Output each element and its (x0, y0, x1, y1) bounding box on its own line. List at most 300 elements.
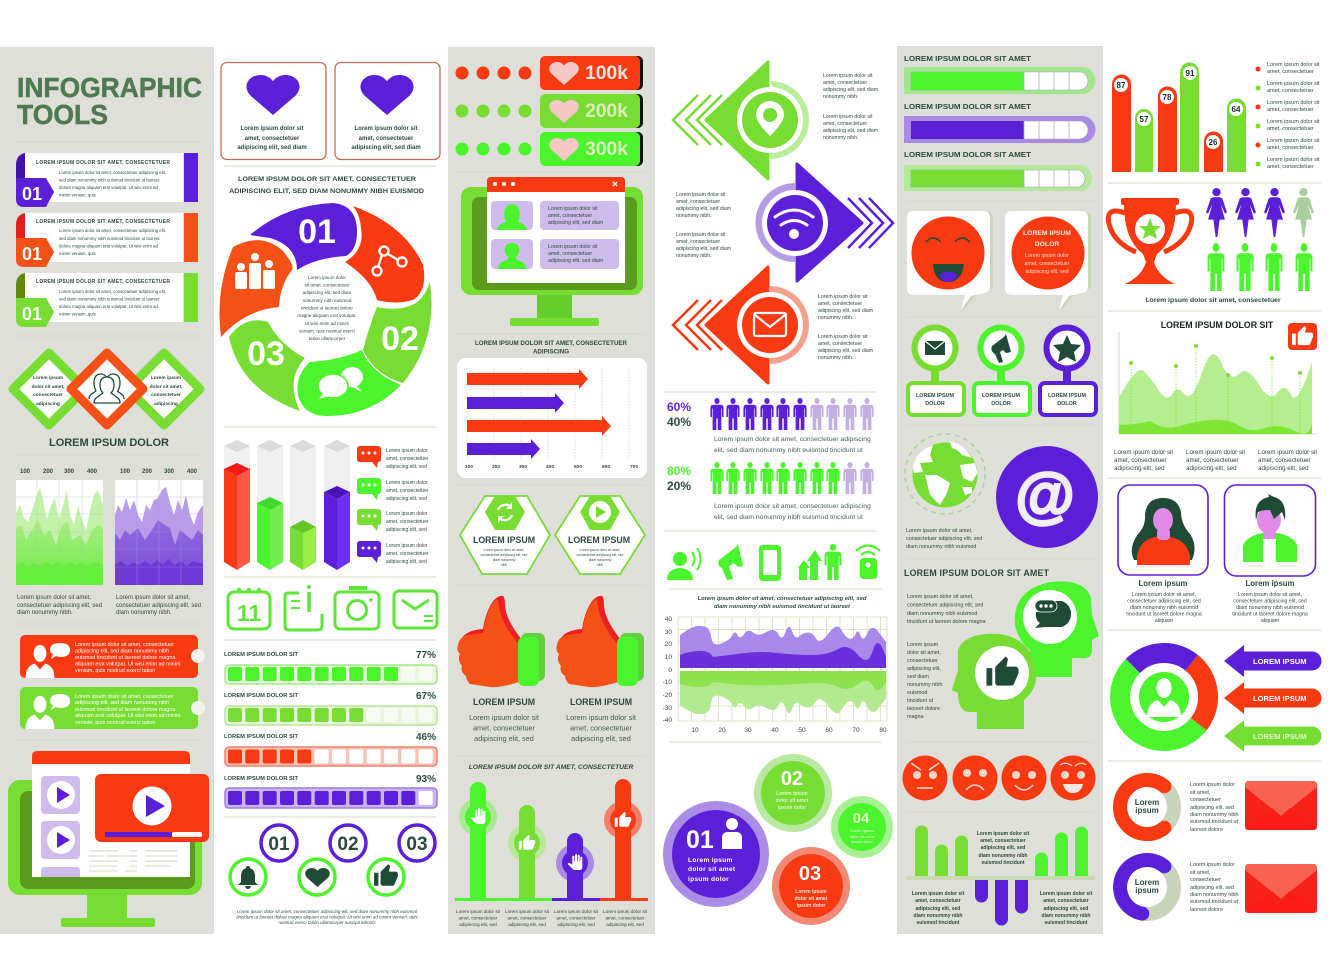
legend: bars: amet, consectetuer (1267, 126, 1314, 132)
chart: rounded number bars: 87 (1117, 81, 1126, 90)
legend item: purple (357, 541, 429, 565)
banner: green 01: Lorem ipsum dolor sit amet, consectetuer adipiscing elit, (59, 289, 166, 294)
bubble 02: ipsum dolor (778, 805, 806, 811)
panel: numbered circles and icons (230, 825, 435, 895)
chart: circular five-segment ring: 01 (298, 213, 336, 251)
callout: red speech banner (20, 635, 205, 678)
profile: woman: adipiscing elit, sed diam (548, 220, 603, 226)
thumb: right: Lorem ipsum dolor sit (566, 713, 636, 722)
arrow: red mail: nonummy nibh. (818, 315, 853, 321)
area chart captions: adipiscing elit, sed (1186, 465, 1237, 472)
thumb: right: adipiscing elit, sed (571, 734, 631, 743)
icon: growth person (798, 544, 841, 580)
capsule: lime (904, 150, 1092, 191)
chart: bipolar area chart: 70 (852, 727, 860, 734)
bar: green hand (459, 782, 497, 898)
pictogram: women (1206, 188, 1314, 237)
panel: portrait man (1224, 485, 1316, 624)
area chart captions: amet, consectetuer (1114, 457, 1167, 464)
panel: red donut and envelope (1120, 780, 1317, 834)
panel: hexagons (460, 496, 645, 574)
thumb: left: Lorem ipsum dolor sit (469, 713, 539, 722)
column background: left (0, 47, 214, 934)
bar captions: adipiscing elit, sed (508, 922, 546, 927)
hexagon: refresh: nibh (501, 563, 507, 567)
progress: 46%: 46% (416, 732, 436, 743)
bubble 01: Lorem ipsum (688, 857, 733, 864)
bubble 03: dolor sit amet (795, 896, 828, 902)
arrow: red mail: Lorem ipsum dolor sit (818, 294, 868, 300)
panel: people stats 80/20 (667, 462, 874, 521)
text: centre: amet, consectetuer (980, 838, 1026, 844)
thumb: left: adipiscing elit, sed (474, 734, 534, 743)
counter: 200k: 200k (585, 100, 628, 122)
bubble: laughing face (907, 211, 993, 311)
video player card (95, 774, 209, 842)
callout: green speech banner: veniam, quis nostrud exerci tation (75, 720, 155, 726)
icon: trophy (1108, 198, 1192, 284)
bar captions: Lorem ipsum dolor sit (505, 909, 550, 914)
diamond: right text: dolor sit amet, (150, 384, 183, 390)
globe caption: diam nonummy nibh euismod (906, 544, 976, 550)
banner: orange 01: sed diam nonummy nibh euismod tincidunt ut laoreet (59, 236, 160, 241)
capsule: purple (904, 102, 1096, 143)
icon: calendar (228, 588, 270, 629)
arrow label: lime: LOREM IPSUM (1253, 732, 1307, 741)
panel: portrait woman: consectetuer adipiscing elit, sed (1127, 598, 1201, 604)
numbered circles: 03 (406, 834, 428, 855)
head: bright green (1015, 581, 1099, 677)
panel: portrait man: tincidunt ut laoreet dolore magna (1232, 612, 1308, 618)
banner: orange 01: 01 (22, 244, 42, 264)
bar captions: Lorem ipsum dolor sit (554, 909, 599, 914)
heading: lorem ipsum dolor: LOREM IPSUM DOLOR (49, 437, 169, 449)
panel: purple donut and envelope: ipsum (1135, 886, 1159, 895)
hexagon: play: diam nonummy (589, 558, 612, 562)
hexagon: play: nibh (597, 563, 603, 567)
callout: green speech banner: euismod tincidunt ut laoreet dolore magna (75, 707, 175, 713)
progress: 77% (224, 650, 437, 684)
legend item: bright green: amet, consectetuer (386, 488, 429, 494)
chart: bipolar area chart: -40 (663, 717, 672, 724)
panel: two heads (907, 581, 1099, 729)
bubble: red text circle: LOREM IPSUM (1023, 230, 1071, 237)
arrow: green location: Lorem ipsum dolor sit (823, 73, 873, 79)
chart: bipolar area chart: 50 (798, 727, 806, 734)
arrow: red mail (673, 267, 873, 383)
bars: bright green up (1035, 827, 1088, 876)
thumb: left (457, 596, 545, 743)
arrow: purple wifi: adipiscing elit, sed diam (676, 206, 731, 212)
diamond: centre with people icon (71, 353, 143, 425)
arrow: green location: adipiscing elit, sed diam (823, 128, 878, 134)
callout: red speech banner: adipiscing elit, sed diam nonummy nibh (75, 648, 169, 654)
arrow: red mail: nonummy nibh. (818, 355, 853, 361)
icon: phone (759, 545, 781, 581)
banner: purple 01: 01 (22, 184, 42, 204)
card: heart 1: adipiscing elit, sed diam (237, 145, 307, 151)
diamond: right text: Lorem ipsum (151, 375, 181, 381)
counter: 100k (456, 56, 643, 90)
bar captions: adipiscing elit, sed (459, 922, 497, 927)
area chart captions: adipiscing elit, sed (1258, 465, 1309, 472)
panel: portrait woman: Lorem ipsum dolor sit amet, (1132, 592, 1196, 598)
numbered circles: 01 (268, 834, 290, 855)
counter: 100k: 100k (585, 62, 628, 84)
thumb: right (556, 596, 644, 743)
panel: portrait man: consectetuer adipiscing elit, sed (1233, 598, 1307, 604)
banner: green 01: 01 (22, 304, 42, 324)
text: lower: dolor sit amet, (907, 650, 941, 656)
bubble 02: 02 (781, 768, 803, 790)
arrow label: purple: LOREM IPSUM (1253, 657, 1307, 666)
bubble 04: dolor sit amet (850, 835, 875, 839)
text: right: euismod tincidunt (1044, 920, 1088, 926)
bubble 04: ipsum dolor (851, 840, 873, 844)
illustration: video monitor (8, 751, 209, 927)
thumb: right: LOREM IPSUM (570, 697, 632, 707)
bubble: red text circle: adipiscing elit, sed (1025, 269, 1069, 275)
banner: orange 01: minim veniam, quis (59, 251, 96, 256)
chart: bipolar area chart (663, 616, 887, 734)
chart: green area chart: 100 (20, 469, 31, 475)
icon: mail (394, 591, 437, 628)
legend: bars: amet, consectetuer (1267, 69, 1314, 75)
globe caption: Lorem ipsum dolor sit amet, (906, 528, 973, 534)
chart: bipolar area chart: 30 (744, 727, 752, 734)
bubble 04: 04 (853, 810, 870, 827)
thumb: left: LOREM IPSUM (473, 697, 535, 707)
banner: purple 01: dolore magna aliquam erat volutpat. Ut wisi enim ad (59, 185, 158, 190)
area chart captions: amet, consectetuer (1258, 457, 1311, 464)
profile: man: adipiscing elit, sed diam (548, 258, 603, 264)
legend item: lime: amet, consectetuer (386, 519, 429, 525)
text: lower: adipiscing elit, (907, 666, 941, 672)
bubble 01: dolor sit amet (688, 866, 736, 873)
chart: green area chart: 200 (43, 469, 54, 475)
callout: green speech banner: adipiscing elit, sed diam nonummy nibh (75, 700, 169, 706)
icons: outline row (228, 585, 437, 630)
panel: purple donut and envelope: adipiscing elit, sed (1190, 885, 1234, 891)
card: heart 2 (335, 62, 440, 160)
banner: orange 01: LOREM IPSUM DOLOR SIT AMET, CONSECTETUER (36, 219, 170, 225)
arrow: purple wifi (676, 164, 893, 281)
arrows: three labels (1224, 645, 1322, 752)
ring centre text: veniam, quis nostrud exerci (299, 328, 355, 334)
pictogram row: 8 of 10 (710, 462, 874, 494)
chart: circular five-segment ring (220, 203, 431, 416)
bars: lime up (915, 826, 968, 876)
heading: heads: LOREM IPSUM DOLOR SIT AMET (904, 568, 1050, 578)
arrow: purple wifi: Lorem ipsum dolor sit (676, 192, 726, 198)
panel: numbered bubbles (663, 754, 893, 925)
chart: bipolar area chart: 10 (691, 727, 699, 734)
heading: ring: LOREM IPSUM DOLOR SIT AMET, CONSECTETUER (238, 176, 416, 183)
chart: bipolar area chart: 60 (825, 727, 833, 734)
arrow: purple wifi: Lorem ipsum dolor sit (676, 232, 726, 238)
banner: green 01: dolore magna aliquam erat volutpat. Ut wisi enim ad (59, 304, 158, 309)
legend: bars (1256, 62, 1320, 170)
pin: mail (908, 328, 964, 415)
callout: green speech banner: aliquam erat volutpat. Ut wisi enim ad minim (75, 713, 181, 719)
icon: chat bubbles (318, 367, 363, 399)
chart: horizontal arrows: 500 (574, 464, 582, 470)
chart: rounded number bars: 78 (1163, 93, 1172, 102)
arrow: green location: amet, consectetuer (823, 80, 867, 86)
icon: envelope (1245, 864, 1317, 913)
arrow: green location: amet, consectetuer (823, 121, 867, 127)
text: lower: nonummy nibh (907, 682, 942, 688)
panel: red donut and envelope: adipiscing elit, sed (1190, 805, 1234, 811)
legend: bars: amet, consectetuer (1267, 164, 1314, 170)
bar captions: amet, consectetuer (458, 916, 498, 920)
legend item: bright green: adipiscing elit, sed (386, 496, 427, 502)
legend: bars: Lorem ipsum dolor sit (1267, 100, 1320, 106)
column background: right (897, 46, 1103, 934)
callout: red speech banner: aliquam erat volutpat. Ut wisi enim ad minim (75, 662, 181, 668)
banner: green 01: LOREM IPSUM DOLOR SIT AMET, CONSECTETUER (36, 279, 170, 285)
icon circles (230, 859, 404, 895)
legend: speech bubbles (357, 446, 429, 565)
banner: purple 01: sed diam nonummy nibh euismod tincidunt ut laoreet (59, 178, 160, 182)
panel: numbered banners (16, 153, 198, 327)
icon: envelope (1245, 781, 1317, 830)
legend: bars: amet, consectetuer (1267, 88, 1314, 94)
text: right: adipiscing elit, sed (1044, 906, 1088, 912)
chart: bipolar area chart: 20 (718, 727, 726, 734)
chart: bipolar area chart: 30 (665, 629, 672, 636)
bubble 03: ipsum dolor (797, 903, 825, 909)
bar captions: amet, consectetuer (556, 916, 596, 920)
chart: rounded number bars: 26 (1209, 138, 1218, 147)
hexagon: refresh: diam nonummy (493, 558, 516, 562)
panel: big thumbs up (457, 596, 644, 743)
numbered circles (261, 825, 435, 861)
bar captions (456, 909, 648, 927)
banner: orange 01: dolore magna aliquam erat volutpat. Ut wisi enim ad (59, 244, 158, 248)
card: heart 2: Lorem ipsum dolor sit (354, 126, 418, 132)
bar captions: amet, consectetuer (605, 916, 645, 920)
banner: purple 01: minim veniam, quis (59, 192, 96, 198)
callout: green speech banner: Lorem ipsum dolor sit amet, consectetuer (75, 694, 174, 700)
caption: italic: Lorem ipsum dolor sit amet, consectetuer adipiscing elit, sed diam nonummy nibh euismod (237, 909, 418, 914)
bar: red (224, 463, 250, 570)
chart: purple area chart: 200 (142, 469, 153, 475)
panel: portrait woman: aliquam (1155, 618, 1173, 624)
legend item: bright green (357, 478, 429, 502)
video thumbnails (41, 776, 80, 877)
arrow: green location: nonummy nibh. (823, 94, 858, 100)
chart: bipolar area chart: -20 (663, 692, 672, 699)
progress: 46% (224, 732, 437, 766)
diamond: right text (128, 353, 200, 425)
legend item: red (357, 446, 429, 470)
pin: megaphone: LOREM IPSUM (982, 393, 1021, 399)
pin: mail: LOREM IPSUM (916, 393, 955, 399)
text: upper: consectetuer adipiscing elit, sed (907, 602, 983, 608)
bar: lime thumb (508, 805, 546, 898)
chart: rounded number bars: 91 (1186, 69, 1195, 78)
progress: 93%: 93% (416, 774, 436, 785)
legend: bars: amet, consectetuer (1267, 145, 1314, 151)
text: right: diam nonummy nibh (1042, 913, 1090, 919)
thumb: right: amet, consectetuer (570, 724, 633, 732)
progress: 93%: LOREM IPSUM DOLOR SIT (224, 776, 299, 782)
chart: purple area chart (115, 469, 203, 585)
panel: like counters (456, 56, 643, 166)
chart: green area chart: 300 (64, 469, 75, 475)
chart: area chart (1119, 332, 1317, 434)
profile: woman: Lorem ipsum dolor sit (548, 206, 598, 212)
card: heart 1: Lorem ipsum dolor sit (240, 126, 304, 132)
panel: red donut and envelope: consectetuer (1190, 797, 1221, 803)
text: lower: tincidunt ut (907, 698, 934, 704)
icon: calendar: 11 (237, 600, 261, 626)
bars: purple down (975, 880, 1028, 926)
panel: portrait woman: tincidunt ut laoreet dolore magna (1126, 612, 1202, 618)
chart captions: Lorem ipsum dolor sit amet, (17, 595, 91, 601)
chart: purple area chart: 100 (120, 469, 131, 475)
panel: heart cards (221, 62, 440, 160)
arrow: purple wifi: amet, consectetuer (676, 199, 720, 205)
arrow: red mail: adipiscing elit, sed diam (818, 348, 873, 354)
icon: note (285, 585, 322, 630)
ring centre text: magne aliquam erat volutpat. (297, 313, 357, 318)
icon: remote signal (856, 546, 880, 579)
chart: bipolar area chart: -30 (663, 705, 672, 712)
panel: red donut and envelope: sit amet, (1190, 790, 1211, 796)
counter: 300k (456, 132, 643, 166)
profile: woman: amet, consectetuer (548, 213, 592, 219)
banner: green 01: sed diam nonummy nibh euismod tincidunt ut laoreet (59, 296, 160, 302)
banner: orange 01 (16, 213, 198, 267)
chart: horizontal arrows: 400 (546, 464, 554, 470)
chart captions: diam nonummy nibh. (17, 610, 73, 616)
chart: circular five-segment ring: 03 (247, 335, 285, 373)
callout: green speech banner (20, 687, 205, 729)
bar captions: adipiscing elit, sed (606, 922, 644, 927)
diamond: left text: adipiscing (36, 401, 60, 407)
panel: people stats 60/40: 40% (667, 415, 691, 429)
panel: people stats 60/40 (667, 398, 874, 454)
legend: bars: Lorem ipsum dolor sit (1267, 157, 1320, 163)
callout: red speech banner: veniam, quis nostrud exerci tation (75, 668, 155, 674)
progress: 93% (224, 774, 437, 808)
heading: area chart: LOREM IPSUM DOLOR SIT (1161, 320, 1274, 330)
emoji: laugh (1050, 756, 1096, 800)
progress: 77%: 77% (416, 650, 436, 661)
bubble: red text circle: Lorem ipsum dolor (1025, 253, 1069, 259)
panel: purple donut and envelope: consectetuer (1190, 877, 1221, 883)
progress: 67%: LOREM IPSUM DOLOR SIT (224, 693, 299, 699)
bar: red thumb (604, 779, 642, 898)
hexagon: refresh (460, 496, 550, 574)
capsule: purple: LOREM IPSUM DOLOR SIT AMET (904, 102, 1031, 111)
arrow label: red: LOREM IPSUM (1253, 694, 1307, 703)
icons: bright green row (667, 544, 880, 581)
panel: emoji speech bubbles (907, 211, 1091, 311)
panel: people stats 80/20: Lorem ipsum dolor sit amet, consectetuer adipiscing (714, 503, 871, 510)
bar captions: adipiscing elit, sed (557, 922, 595, 927)
text: right: Lorem ipsum dolor sit (1040, 891, 1093, 897)
chart: bipolar area chart: 40 (665, 616, 672, 623)
text: lower: sed diam (907, 674, 929, 680)
thumb: left: amet, consectetuer (473, 724, 536, 732)
chart: horizontal arrows: 100 (465, 464, 473, 470)
pictogram row: 6 of 10 (710, 398, 874, 430)
text: lower: Lorem ipsum (907, 642, 939, 648)
chart: thermometer bars (455, 779, 648, 927)
panel: purple donut and envelope: Lorem ipsum dolor (1190, 862, 1235, 868)
hexagon: play: consectetuer adipiscing elit, sed (577, 553, 624, 557)
legend item: bright green: Lorem ipsum dolor (386, 480, 428, 486)
profile: woman (491, 201, 619, 230)
illustration: profile monitor (461, 177, 643, 326)
bubble 02: dolor sit amet (776, 798, 809, 804)
diamond: left text (13, 353, 85, 425)
title: TOOLS (17, 99, 108, 130)
arrow: green location: Lorem ipsum dolor sit (823, 114, 873, 120)
panel: portrait woman (1118, 485, 1208, 624)
diamond: left text: Lorem ipsum (33, 375, 63, 381)
text: upper: tincidunt ut laoreet dolore magna (907, 619, 986, 625)
heading: ring: ADIPISCING ELIT, SED DIAM NONUMMY NIBH EUISMOD (229, 188, 424, 195)
heading: italic: LOREM IPSUM DOLOR SIT AMET, CONSECTETUER (469, 764, 633, 771)
chart captions: consectetuer adipiscing elit, sed (116, 603, 201, 609)
panel: portrait man: diam nonummy nibh euismod (1236, 605, 1304, 611)
panel: purple donut and envelope: euismod tincidunt ut (1190, 899, 1238, 905)
panel: red donut and envelope: Lorem ipsum dolor (1190, 782, 1235, 788)
heading: bipolar chart: Lorem ipsum dolor sit amet, consectetuer adipiscing elit, sed (698, 596, 867, 602)
text: upper: Lorem ipsum dolor sit amet, (907, 594, 974, 600)
capsule: lime: LOREM IPSUM DOLOR SIT AMET (904, 150, 1031, 159)
chart: bipolar area chart: 0 (668, 667, 672, 674)
bubble 03: Lorem ipsum (795, 889, 827, 895)
bar: ghost columns (224, 440, 350, 570)
ring centre text: nonummy nibh euismod (303, 298, 352, 303)
panel: people stats 80/20: 20% (667, 479, 691, 493)
arrow: green location (673, 62, 878, 179)
panel: purple donut and envelope: diam nonummy nibh (1190, 892, 1239, 898)
ring centre text: adipiscing elit, sed diam (303, 290, 352, 295)
pin: megaphone: DOLOR (991, 401, 1011, 407)
banner: orange 01: Lorem ipsum dolor sit amet, consectetuer adipiscing elit, (59, 228, 166, 233)
panel: portrait man: Lorem ipsum dolor sit amet, (1238, 592, 1302, 598)
head: lime (952, 634, 1036, 729)
area chart captions: Lorem ipsum dolor sit (1258, 449, 1317, 456)
hexagon: play: LOREM IPSUM (568, 535, 630, 545)
panel: emoji row (902, 756, 1096, 800)
panel: icon pins (908, 328, 1096, 415)
ring centre text: sit amet, consectetuer (305, 282, 350, 288)
text: left: euismod tincidunt (916, 920, 960, 926)
panel: purple donut and envelope: sit amet, (1190, 870, 1211, 876)
hexagon: play (555, 496, 645, 574)
bubble: red text circle (1005, 211, 1091, 311)
panel: portrait man: aliquam (1261, 618, 1279, 624)
panel: portrait woman: Lorem ipsum (1139, 579, 1188, 588)
panel: red donut and envelope: Lorem (1135, 798, 1159, 807)
bar: purple hand (556, 833, 594, 898)
emoji: sad (952, 756, 998, 800)
chart: bipolar area chart: 20 (665, 641, 672, 648)
text: lower: laoreet dolore (907, 706, 940, 712)
hexagon: refresh: consectetuer adipiscing elit, sed (481, 553, 528, 557)
chart: bipolar area chart: 40 (771, 727, 779, 734)
chart captions (17, 595, 201, 616)
arrow: purple wifi: nonummy nibh. (676, 213, 711, 219)
hexagon: refresh: Lorem ipsum dolor sit amet, (484, 548, 524, 552)
